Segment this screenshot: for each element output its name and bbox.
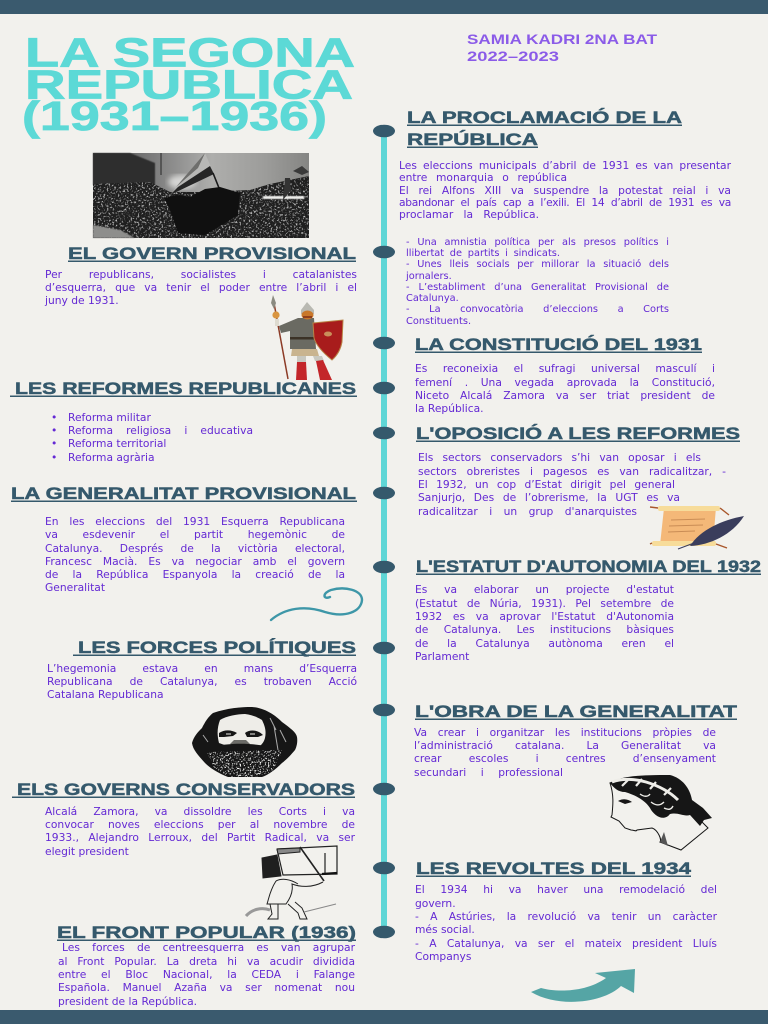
text: les forces politiques: Republicana de Catalunya, es trobaven Acció <box>47 675 357 688</box>
heading: la generalitat provisional: LA GENERALITAT PROVISIONAL <box>11 485 356 503</box>
text: la generalitat provisional <box>45 515 345 594</box>
heading: l'oposicio a les reformes: L'OPOSICIÓ A LES REFORMES <box>416 424 740 443</box>
text: l'estatut: (Estatut de Núria, 1931). Pel setembre de <box>415 597 674 610</box>
photo: crowd with flag <box>93 153 309 238</box>
heading: la proclamacio de la republica: LA PROCLAMACIÓ DE LA <box>407 108 682 127</box>
title: (1931–1936) <box>22 93 327 139</box>
text: l'obra: secundari i professional <box>414 766 563 779</box>
text: mesures del govern provisional: - Una amnistia política per als presos polítics i <box>406 237 669 248</box>
list: les reformes republicanes: • <box>51 451 57 464</box>
list: les reformes republicanes <box>51 411 253 464</box>
text: mesures del govern provisional: llibertat de partits i sindicats. <box>406 248 560 259</box>
list: les reformes republicanes: • <box>51 411 57 424</box>
heading: les forces politiques: LES FORCES POLÍTIQUES <box>78 638 356 657</box>
text: l'oposicio: sectors obreristes i pagesos es van radicalitzar, - <box>418 465 726 478</box>
text: mesures del govern provisional: - Unes lleis socials per millorar la situació dels <box>406 259 669 270</box>
top bar <box>0 0 768 14</box>
illustration: labourer carrying a load <box>246 846 337 919</box>
list: les reformes republicanes: Reforma religiosa i educativa <box>68 424 253 437</box>
text: les forces politiques: L’hegemonia estava en mans d’Esquerra <box>47 662 357 675</box>
heading: l'obra de la generalitat: L'OBRA DE LA GENERALITAT <box>415 703 737 721</box>
text: les revoltes: govern. <box>415 897 456 910</box>
text: el govern provisional: juny de 1931. <box>45 294 119 307</box>
text: la constitucio: la República. <box>415 402 484 415</box>
text: el govern provisional <box>44 268 357 307</box>
text: els governs conservadors: Alcalá Zamora, va dissoldre les Corts i va <box>45 805 355 818</box>
text: mesures del govern provisional <box>406 237 669 327</box>
text: la proclamacio: entre monarquia o república <box>399 171 567 184</box>
text: l'oposicio: Sanjurjo, Des de l’obrerisme, la UGT es va <box>418 491 680 504</box>
text: mesures del govern provisional: - L’establiment d’una Generalitat Provisional de <box>406 282 669 293</box>
title: REPUBLICA <box>25 62 353 108</box>
text: l'estatut: de Catalunya. Les institucions bàsiques <box>415 623 674 636</box>
text: les revoltes: - A Catalunya, va ser el mateix president Lluís <box>415 937 717 950</box>
text: el front popular: entre el Bloc Nacional, la CEDA i Falange <box>58 968 355 981</box>
text: el front popular: Española. Manuel Azaña va ser nomenat nou <box>58 981 355 994</box>
text: els governs conservadors: convocar noves eleccions per al novembre de <box>45 818 355 831</box>
text: el front popular: al Front Popular. La dreta hi va acudir dividida <box>58 955 355 968</box>
text: la proclamacio: El rei Alfons XIII va suspendre la potestat reial i va <box>399 184 731 197</box>
author and school year: SAMIA KADRI 2NA BAT <box>467 31 658 47</box>
title: LA SEGONA <box>25 30 355 76</box>
text: l'oposicio: Els sectors conservadors s’hi van oposar i els <box>418 451 701 464</box>
text: les revoltes: Companys <box>415 950 471 963</box>
text: l'obra <box>414 726 716 779</box>
title <box>22 30 355 139</box>
heading: el front popular: EL FRONT POPULAR (1936) <box>57 924 356 942</box>
text: mesures del govern provisional: - La convocatòria d’eleccions a Corts <box>406 304 669 315</box>
text: el govern provisional: Per republicans, socialistes i catalanistes <box>45 268 357 281</box>
list: les reformes republicanes: • <box>51 437 57 450</box>
list: les reformes republicanes: • <box>51 424 57 437</box>
heading: la proclamacio de la republica <box>407 108 682 149</box>
text: els governs conservadors <box>45 805 355 858</box>
text: l'estatut: 1932 es va aprovar l'Estatut d'Autonomia <box>415 610 674 623</box>
text: mesures del govern provisional: Catalunya. <box>406 293 459 304</box>
heading: la proclamacio de la republica: REPÚBLICA <box>407 130 538 149</box>
heading: les revoltes del 1934: LES REVOLTES DEL 1934 <box>416 860 692 878</box>
text: l'estatut: Parlament <box>415 650 469 663</box>
text: la generalitat provisional: va esdevenir el partit hegemònic de <box>45 528 345 541</box>
portrait: laurel-crowned classical head <box>610 775 712 850</box>
text: la generalitat provisional: Generalitat <box>45 581 105 594</box>
timeline axis <box>373 125 395 938</box>
text: mesures del govern provisional: Constituents. <box>406 316 471 327</box>
author and school year <box>467 31 658 64</box>
text: els governs conservadors: 1933., Alejandro Lerroux, del Partit Radical, va ser <box>45 831 355 844</box>
text: la constitucio: femení . Una vegada aprovada la Constitució, <box>415 376 715 389</box>
text: la generalitat provisional: de la República Espanyola la creació de la <box>45 568 345 581</box>
text: la proclamacio: abandonar el país cap a l’exili. El 14 d’abril de 1931 es va <box>399 196 731 209</box>
text: l'obra: crear escoles i centres d’ensenyament <box>414 752 716 765</box>
text: el front popular: president de la República. <box>58 995 197 1008</box>
author and school year: 2022–2023 <box>467 48 559 64</box>
text: les forces politiques <box>47 662 357 701</box>
text: l'oposicio: El 1932, un cop d’Estat dirigit pel general <box>418 478 675 491</box>
text: el govern provisional: d’esquerra, que va tenir el poder entre l’abril i el <box>45 281 357 294</box>
heading: l'estatut d'autonomia del 1932: L'ESTATUT D'AUTONOMIA DEL 1932 <box>416 558 761 576</box>
portrait: Karl Marx <box>192 707 297 778</box>
text: l'obra: Va crear i organitzar les institucions pròpies de <box>414 726 716 739</box>
heading: el govern provisional: EL GOVERN PROVISIONAL <box>68 245 356 263</box>
text: les revoltes <box>415 883 717 963</box>
text: la constitucio: Niceto Alcalá Zamora va ser triat president de <box>415 389 715 402</box>
text: l'obra: l’administració catalana. La Generalitat va <box>414 739 716 752</box>
text: l'oposicio: radicalitzar i un grup d'anarquistes <box>418 505 637 518</box>
bottom bar <box>0 1010 768 1024</box>
heading: els governs conservadors: ELS GOVERNS CONSERVADORS <box>17 781 355 799</box>
arrow <box>531 969 635 1002</box>
text: l'oposicio <box>418 451 726 518</box>
text: les forces politiques: Catalana Republicana <box>47 688 164 701</box>
text: la proclamacio: Les eleccions municipals d’abril de 1931 es van presentar <box>399 159 731 172</box>
list: les reformes republicanes: Reforma agrària <box>68 451 155 464</box>
decorative swirl <box>271 588 362 620</box>
text: l'estatut <box>415 583 674 663</box>
text: la constitucio <box>415 362 715 415</box>
text: l'estatut: de la Catalunya autònoma eren el <box>415 637 674 650</box>
text: mesures del govern provisional: jornalers. <box>406 271 452 282</box>
heading: les reformes republicanes: LES REFORMES REPUBLICANES <box>15 380 356 398</box>
list: les reformes republicanes: Reforma territorial <box>68 437 166 450</box>
text: la generalitat provisional: En les eleccions del 1931 Esquerra Republicana <box>45 515 345 528</box>
text: el front popular: Les forces de centreesquerra es van agrupar <box>62 941 355 954</box>
text: la generalitat provisional: Francesc Macià. Es va negociar amb el govern <box>45 555 345 568</box>
heading: la constitucio del 1931: LA CONSTITUCIÓ DEL 1931 <box>415 335 702 354</box>
text: les revoltes: - A Astúries, la revolució va tenir un caràcter <box>415 910 717 923</box>
text: la constitucio: Es reconeixia el sufragi universal masculí i <box>415 362 715 375</box>
icon: scroll and quill <box>650 506 744 549</box>
text: les revoltes: El 1934 hi va haver una remodelació del <box>415 883 717 896</box>
text: els governs conservadors: elegit president <box>45 845 129 858</box>
list: les reformes republicanes: Reforma militar <box>68 411 151 424</box>
text: les revoltes: més social. <box>415 923 475 936</box>
text: el front popular <box>58 941 355 1008</box>
icon: soldier with spear and shield <box>271 295 343 380</box>
text: l'estatut: Es va elaborar un projecte d'estatut <box>415 583 674 596</box>
text: la proclamacio <box>399 159 731 221</box>
text: la proclamacio: proclamar la República. <box>399 208 539 221</box>
text: la generalitat provisional: Catalunya. Després de la victòria electoral, <box>45 542 345 555</box>
